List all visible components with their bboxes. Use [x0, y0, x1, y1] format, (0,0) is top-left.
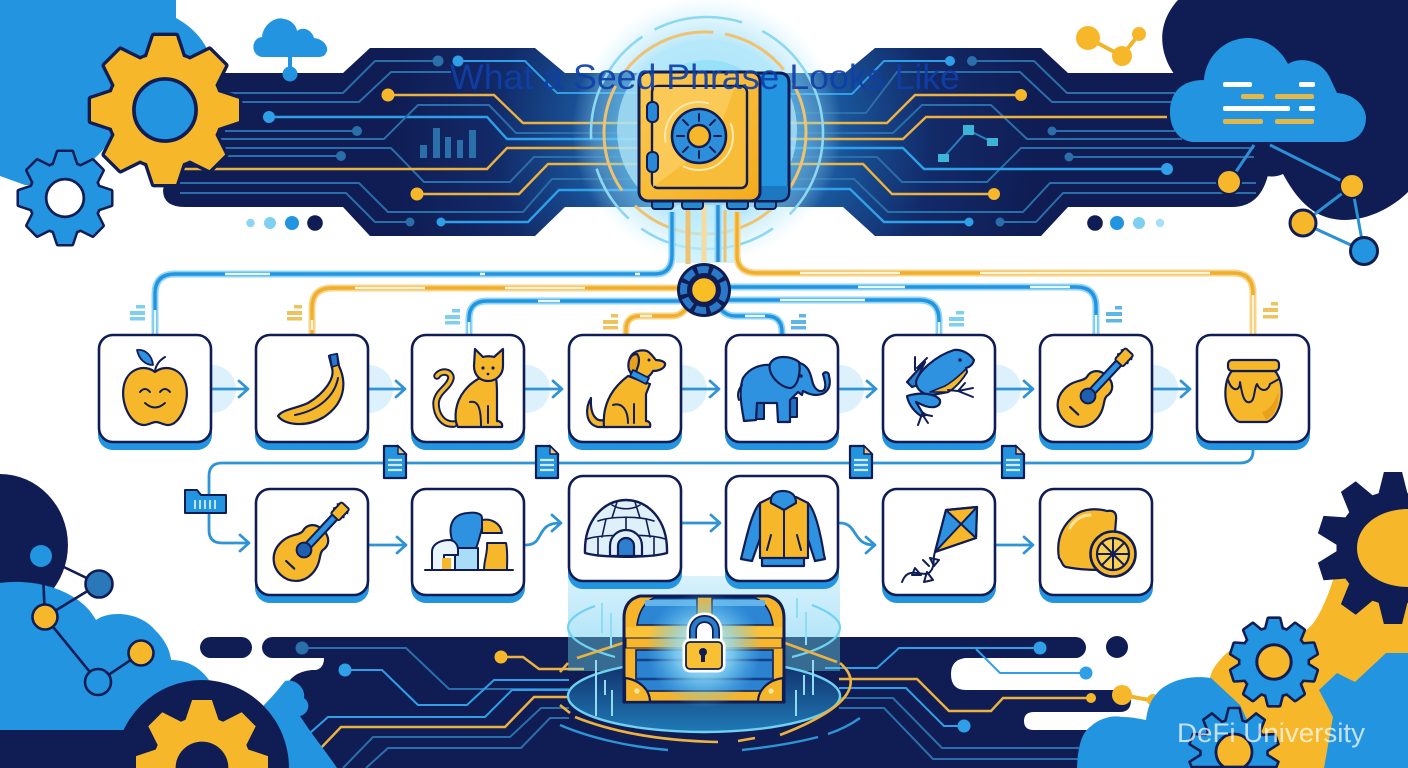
card: jacket [725, 476, 839, 589]
icon: dog [587, 350, 665, 427]
icon: yellow gear [136, 700, 268, 768]
icon: jacket [741, 491, 825, 566]
card: banana [255, 335, 369, 450]
row one flow arrows [212, 381, 1190, 397]
icon: kite [902, 507, 977, 582]
icon: frog [907, 350, 974, 425]
top circuit board band [163, 48, 1268, 236]
card: apple [98, 335, 212, 450]
glow behind safe [572, 0, 842, 265]
title: What a Seed Phrase Looks Like [450, 58, 960, 97]
icon: banana [278, 354, 343, 424]
connectors from hub to row one [155, 212, 1253, 335]
top-right navy cloud backdrop [1162, 0, 1408, 220]
icon: document four [1002, 446, 1024, 478]
icon: padlock [646, 592, 762, 708]
row one arrow glows [188, 365, 1178, 413]
card: kite [882, 489, 996, 603]
card: guitar row two [255, 489, 369, 603]
icon: cat [436, 349, 503, 427]
icon: document two [536, 446, 558, 478]
network nodes top right [1217, 145, 1378, 264]
bottom-left navy base [0, 730, 135, 768]
navy dome with gear [115, 680, 289, 768]
icon: small yellow network bottom [1112, 685, 1159, 706]
icon: igloo [585, 500, 667, 557]
safe dial [665, 102, 733, 170]
icon: small cloud with node [253, 18, 327, 82]
bottom-right yellow blob [1209, 560, 1408, 768]
hub connector node [677, 263, 731, 317]
icon: honey jar [1225, 360, 1282, 422]
icon: treasure chest [624, 592, 784, 708]
bottom-right blue cloud [1077, 677, 1270, 768]
icon: large navy gear [1318, 472, 1408, 624]
card: honey jar [1196, 335, 1310, 450]
icon: cloud with data lines [1170, 38, 1366, 142]
left circuit traces [180, 56, 640, 226]
icon: yellow network top [1076, 26, 1146, 66]
icon: folder [185, 490, 226, 513]
vertical data beams under safe [676, 205, 734, 264]
icon: safe vault [639, 72, 789, 209]
icon: elephant [738, 357, 830, 422]
icon: guitar [1049, 337, 1146, 436]
icon: line graph [938, 125, 998, 162]
row two flow arrows [369, 515, 1033, 553]
card: abstract building [411, 489, 525, 603]
icon: lemon [1058, 509, 1136, 576]
bottom left traces [296, 642, 584, 768]
card: cat [411, 335, 525, 450]
icon: small blue gear [19, 152, 111, 244]
bottom circuit band [200, 636, 1131, 768]
bottom-left blue cloud [0, 582, 225, 768]
top-left blue cloud backdrop [0, 0, 212, 185]
platform rings under chest [560, 598, 860, 750]
right circuit traces [790, 56, 1256, 226]
bottom-left navy dome backdrop [0, 474, 68, 616]
icon: guitar [265, 491, 362, 590]
card: dog [568, 335, 682, 450]
decorative dots left [246, 215, 323, 231]
network nodes bottom left [30, 545, 154, 695]
card: elephant [725, 335, 839, 450]
chest beam of light [568, 576, 840, 640]
bottom right traces [825, 642, 1096, 759]
chest beam over band [568, 637, 840, 671]
icon: blue gear upper [1231, 619, 1317, 705]
icon: smiling apple [123, 350, 187, 425]
row two entry connector [209, 450, 1253, 551]
card: guitar [1039, 335, 1153, 450]
decorative dots right [1087, 215, 1164, 231]
data lines in cloud [1223, 82, 1315, 124]
card: frog [882, 335, 996, 450]
icon: bar chart [420, 128, 476, 158]
card: lemon [1039, 489, 1153, 603]
icon: large yellow gear [91, 36, 239, 184]
bottom-right blue hex blob [1319, 653, 1408, 768]
card: igloo [568, 476, 682, 589]
icon: blue gear lower [1190, 708, 1278, 767]
icon: document one [384, 446, 406, 478]
icon: building figures [425, 513, 513, 570]
blue lump beside dome [240, 680, 337, 768]
data tick icons above cards [130, 302, 1278, 330]
watermark: DeFi University: DeFi University [1177, 718, 1366, 748]
icon: document three [850, 446, 872, 478]
